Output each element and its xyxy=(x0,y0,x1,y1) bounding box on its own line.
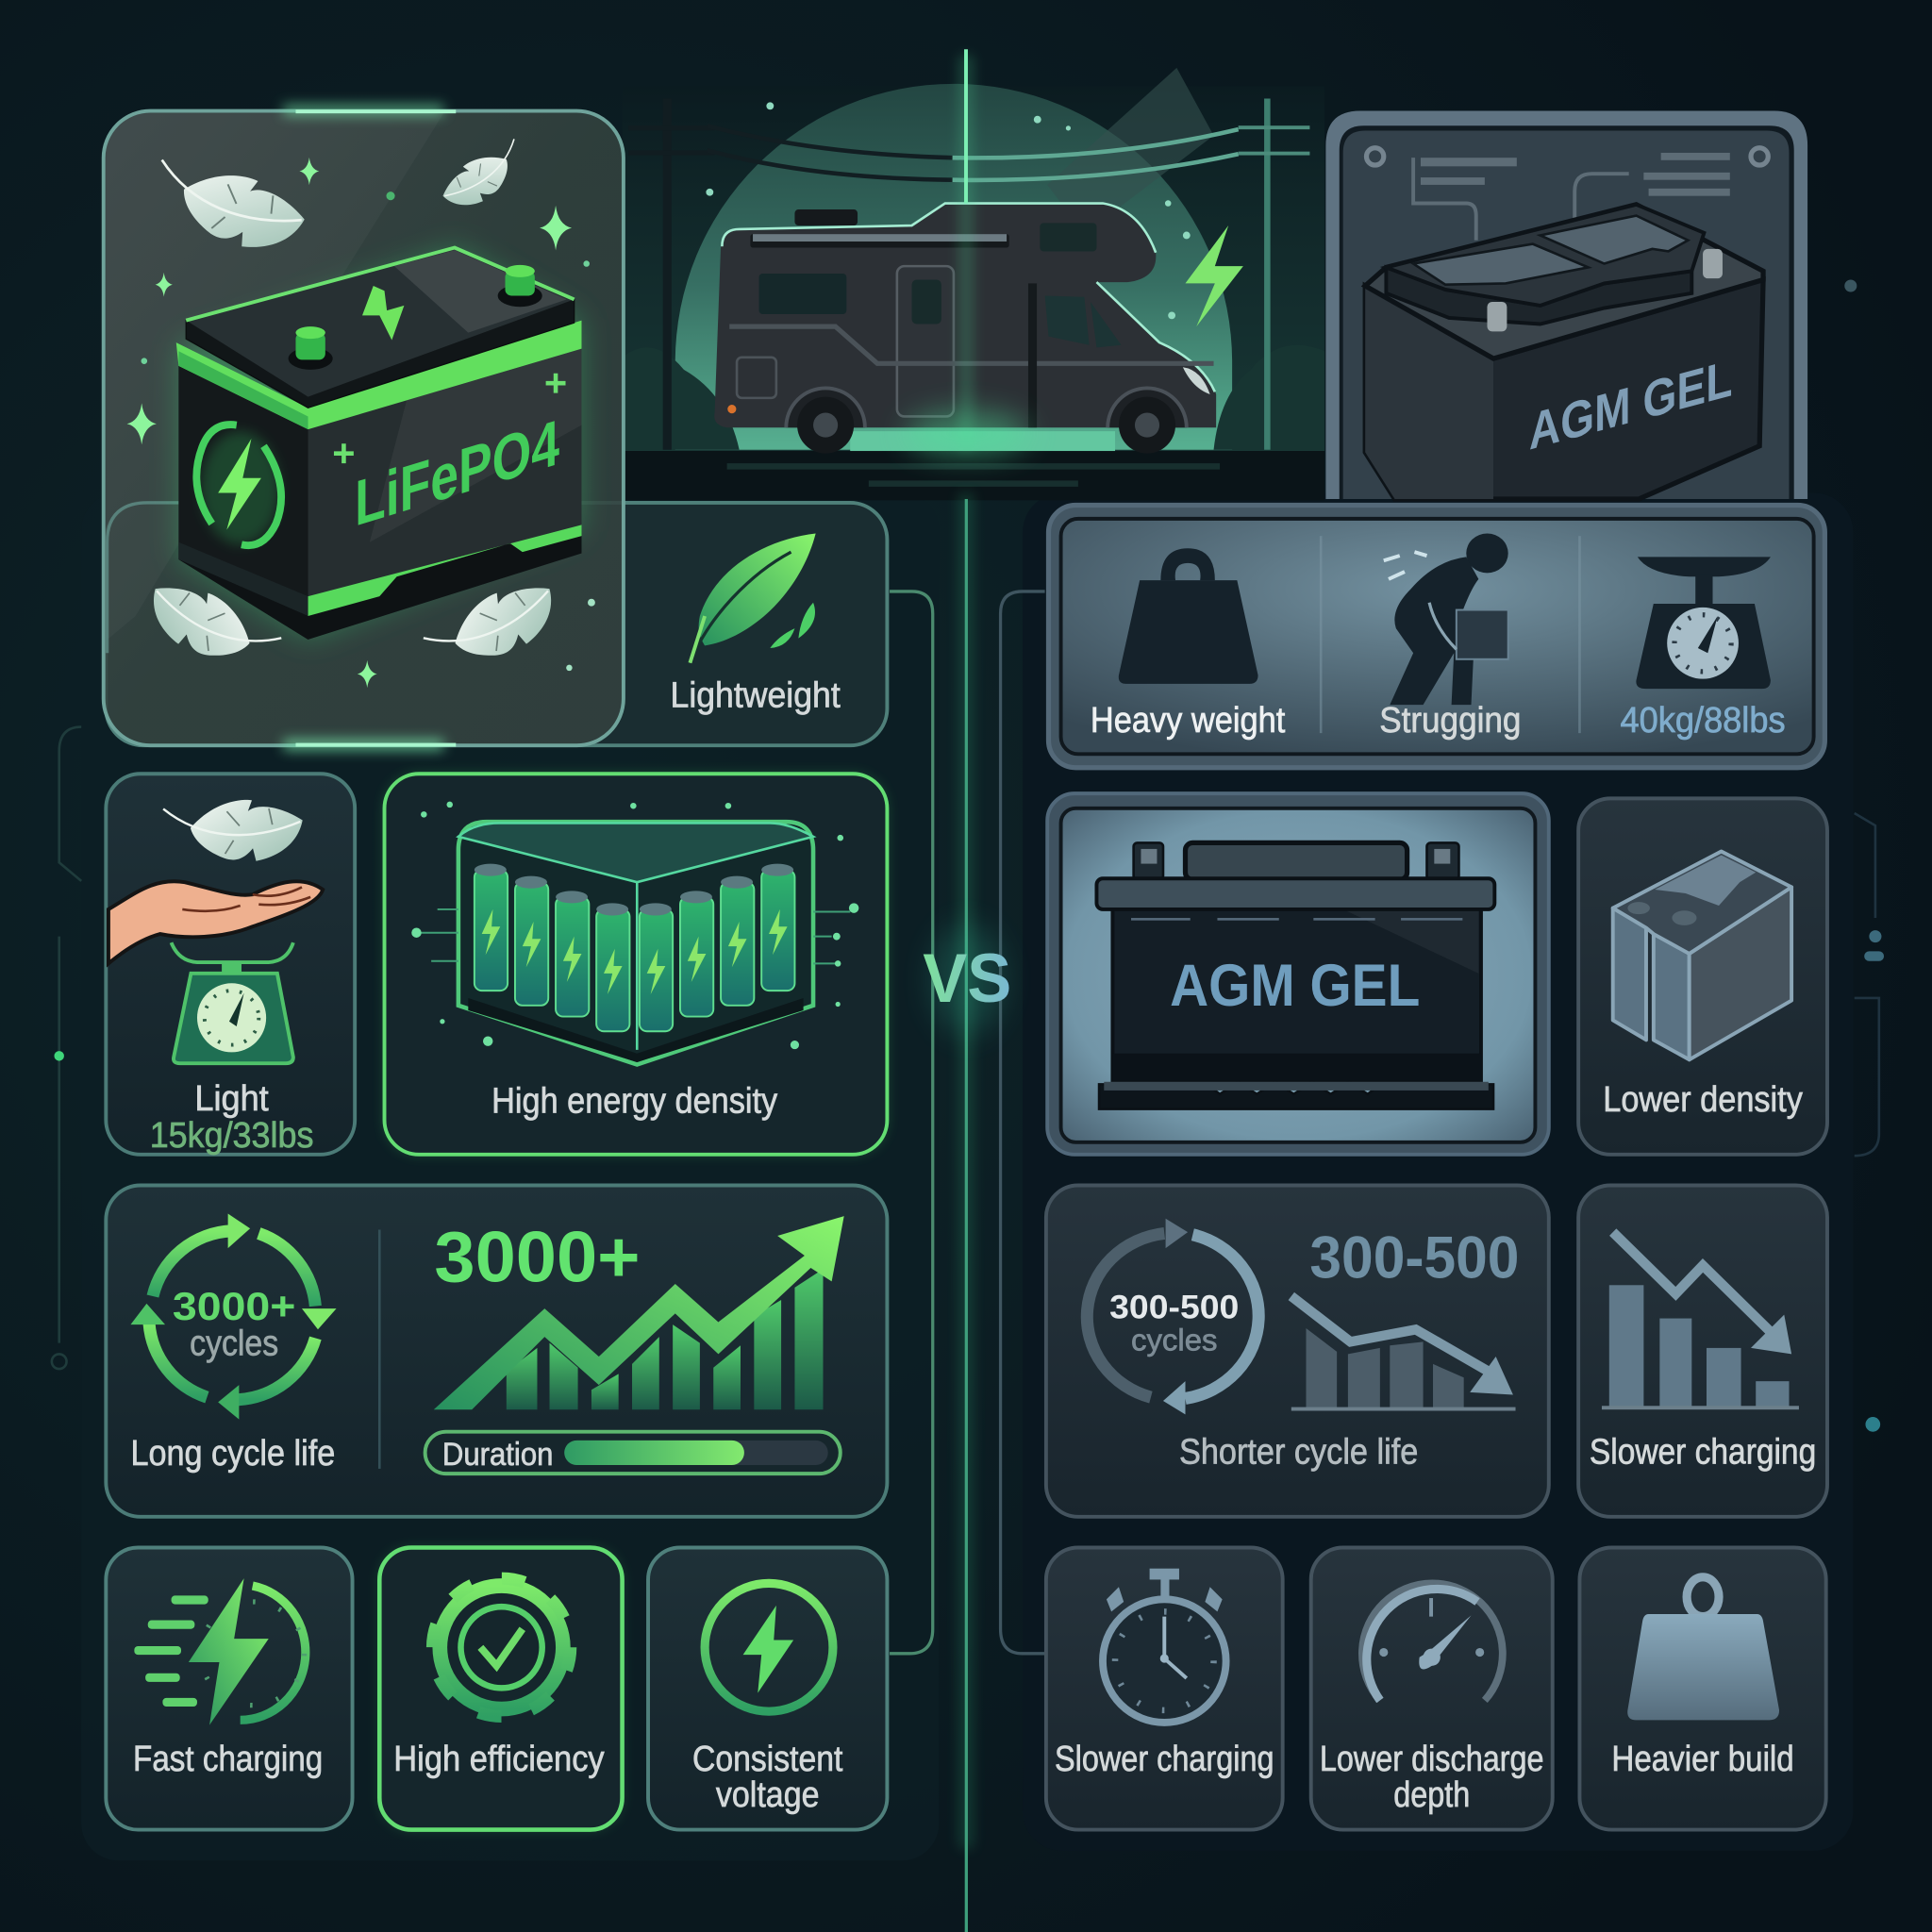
duration bar: Duration xyxy=(442,1437,553,1473)
label: Shorter cycle life xyxy=(1179,1433,1418,1473)
icon: blue weight xyxy=(1627,1577,1779,1720)
VS badge: VS xyxy=(923,941,1011,1017)
cells xyxy=(475,870,794,1031)
icon: black scale xyxy=(1636,557,1771,689)
LiFePO4 battery xyxy=(176,248,581,640)
card: slower charging chart xyxy=(1578,1185,1827,1517)
label: depth xyxy=(1393,1775,1470,1815)
blueprint details xyxy=(1366,148,1768,246)
labels xyxy=(1091,701,1786,741)
card: lower density xyxy=(1578,798,1827,1155)
scene dots xyxy=(706,102,1191,319)
scene: RV on road with power lines xyxy=(623,68,1324,500)
wires and dots xyxy=(411,802,858,1049)
icon: bolt in circle xyxy=(705,1583,833,1711)
label: Heavier build xyxy=(1611,1740,1794,1779)
labels: Light xyxy=(194,1079,269,1119)
sparkles xyxy=(127,158,595,688)
plus marks xyxy=(334,374,566,463)
card: light weight hand and scale: 15kg/33lbs xyxy=(150,1116,313,1156)
big number: 3000+ xyxy=(434,1217,641,1297)
ground glow xyxy=(850,431,1115,451)
AGM GEL label on battery: AGM GEL xyxy=(1529,348,1732,461)
label: High efficiency xyxy=(393,1740,605,1779)
labels: 40kg/88lbs xyxy=(1621,701,1786,741)
labels: Strugging xyxy=(1379,701,1521,741)
panel: AGM GEL front battery xyxy=(1047,793,1549,1155)
duration bar xyxy=(425,1432,841,1474)
cycles count xyxy=(173,1284,295,1364)
battery glow xyxy=(178,246,581,640)
lid block sides xyxy=(1386,267,1691,325)
swirl power icon xyxy=(196,425,281,545)
card: high efficiency xyxy=(379,1547,623,1830)
label: Fast charging xyxy=(133,1740,323,1779)
wheels xyxy=(786,388,1187,454)
bushes xyxy=(623,345,1324,450)
label: Lower discharge xyxy=(1320,1740,1544,1779)
lid xyxy=(186,248,575,408)
battery body xyxy=(1096,842,1494,1109)
icon: cell pack xyxy=(411,802,858,1064)
left connector line xyxy=(890,591,933,1654)
moon glow xyxy=(675,84,1232,450)
power wires xyxy=(708,125,1239,180)
cycles count: cycles xyxy=(1131,1323,1217,1357)
top bolt xyxy=(362,286,404,340)
icon: blocky battery xyxy=(1613,852,1791,1059)
upper green band xyxy=(176,321,581,429)
icon: struggling person xyxy=(1384,534,1508,705)
icon: feather xyxy=(163,796,305,867)
icon: green scale xyxy=(172,942,293,1063)
label: Long cycle life xyxy=(130,1434,335,1474)
left column backdrop xyxy=(81,492,939,1860)
card: consistent voltage xyxy=(648,1547,887,1830)
right edge circuit decoration xyxy=(1844,279,1884,1432)
cycles count xyxy=(1109,1290,1239,1357)
card: light weight hand and scale xyxy=(106,774,355,1156)
card: lightweight xyxy=(106,503,887,745)
AGM GEL label: AGM GEL xyxy=(1170,953,1420,1019)
label: High energy density xyxy=(491,1081,777,1121)
card: long cycle life xyxy=(106,1185,887,1517)
label: Slower charging xyxy=(1055,1740,1274,1779)
feathers xyxy=(137,137,568,687)
cycles count: cycles xyxy=(190,1324,278,1364)
declining chart xyxy=(1291,1296,1516,1411)
lid block top xyxy=(1386,205,1704,306)
card: shorter cycle life xyxy=(1046,1185,1549,1517)
VS badge xyxy=(923,924,1011,1035)
icon: gear with check xyxy=(432,1578,571,1716)
label: Slower charging xyxy=(1590,1433,1816,1473)
label xyxy=(1320,1740,1544,1815)
card: slower charging stopwatch xyxy=(1046,1547,1283,1830)
card: heavier build xyxy=(1579,1547,1826,1830)
label: Lightweight xyxy=(671,676,841,716)
cycles count: 3000+ xyxy=(173,1284,295,1328)
card: lower discharge depth xyxy=(1311,1547,1553,1830)
panel: heavy weight strip xyxy=(1049,506,1824,768)
right column backdrop xyxy=(1023,492,1853,1851)
left edge circuit decoration xyxy=(52,727,81,1369)
green lightning bolt xyxy=(1185,225,1243,326)
label xyxy=(692,1740,843,1815)
road xyxy=(623,451,1324,500)
big number: 300-500 xyxy=(1309,1224,1519,1291)
rising chart xyxy=(434,1216,844,1409)
label: Consistent xyxy=(692,1740,843,1779)
sub-panel outline inside glass xyxy=(108,503,185,653)
icon: green leaf xyxy=(690,534,816,663)
label: voltage xyxy=(716,1775,820,1815)
icon: stopwatch xyxy=(1103,1569,1226,1723)
declining bar chart xyxy=(1602,1232,1799,1409)
LiFePO4 label: LiFePO4 xyxy=(355,406,559,540)
card: fast charging xyxy=(106,1547,353,1830)
icon: black weight xyxy=(1119,548,1258,684)
panel glow bars xyxy=(283,105,456,750)
labels: Heavy weight xyxy=(1091,701,1286,741)
terminals xyxy=(289,265,542,370)
center divider line xyxy=(906,49,1029,1932)
lower green band xyxy=(308,536,581,640)
icon: hand xyxy=(108,881,323,963)
angular backdrop shape xyxy=(1047,68,1214,234)
cycles count: 300-500 xyxy=(1109,1290,1239,1326)
label: Lower density xyxy=(1603,1080,1803,1120)
icon: cycle ring xyxy=(1087,1219,1258,1414)
right power pole xyxy=(1239,98,1309,450)
RV camper xyxy=(714,204,1216,454)
icon: bolt with dial xyxy=(134,1578,306,1725)
icon: cycle arrows xyxy=(130,1214,337,1420)
right connector line xyxy=(1001,591,1045,1654)
panel: AGM GEL hero battery xyxy=(1325,111,1807,499)
panel: LiFePO4 hero battery xyxy=(104,105,624,750)
icon: gauge xyxy=(1362,1583,1503,1700)
card: high energy density xyxy=(385,774,887,1155)
AGM isometric battery xyxy=(1365,205,1763,499)
left power pole xyxy=(628,98,715,450)
